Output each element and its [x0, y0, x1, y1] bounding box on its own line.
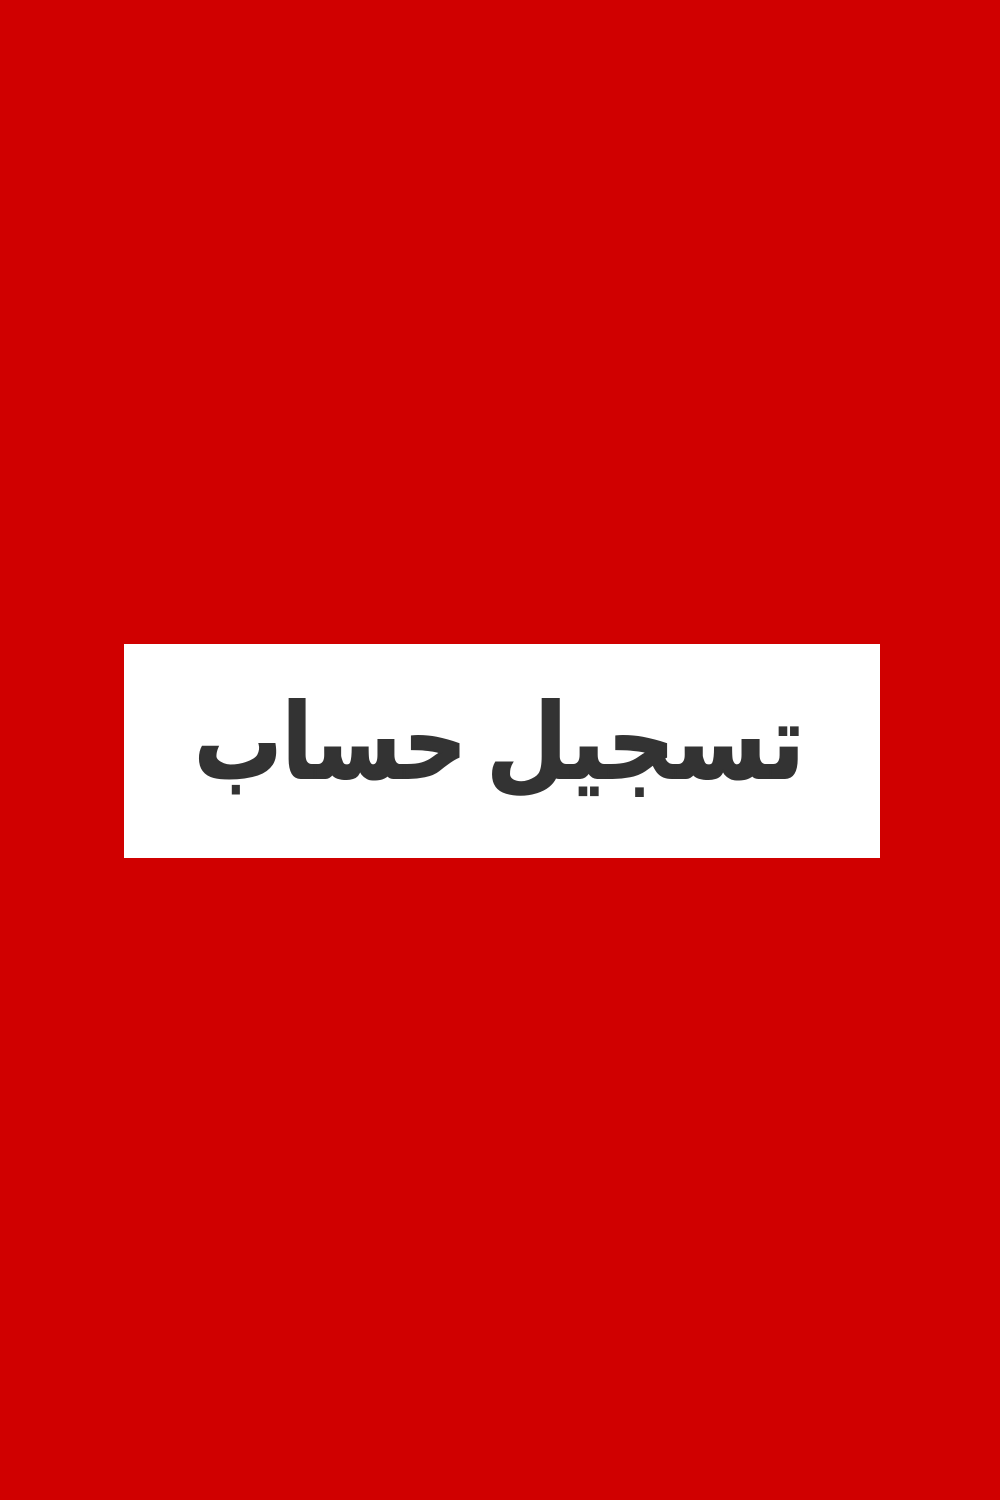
- heading: register account: حساب: [194, 682, 467, 803]
- heading: register account: تسجيل: [486, 682, 805, 803]
- button panel: register account: [124, 644, 880, 858]
- heading: register account: [194, 682, 805, 803]
